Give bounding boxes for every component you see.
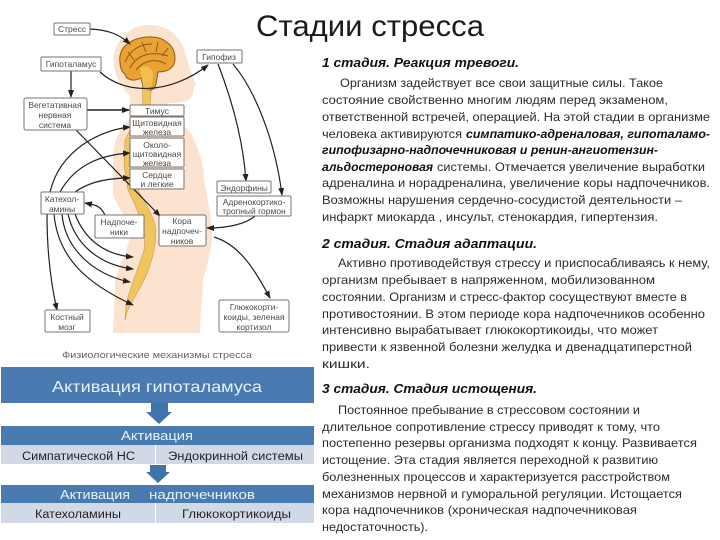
row: sympathetic and endocrine: Эндокринной системы — [168, 451, 303, 463]
box: ACTH: тропный гормон — [222, 206, 286, 216]
box: adrenal cortex: ников — [171, 236, 194, 246]
row: sympathetic and endocrine — [1, 445, 314, 464]
box: thymus — [130, 105, 184, 116]
brain folds — [125, 42, 168, 70]
box: adrenal cortex — [159, 215, 206, 246]
body: stage 2: привести к язвенной болезни желудка и двенадцатиперстной — [322, 340, 692, 354]
box: thyroid: Щитовидная — [132, 118, 182, 128]
body: stage 3: постепенно резервы организма подходят к концу. Развивается — [322, 436, 697, 450]
box: stress — [54, 23, 90, 35]
block: adrenal activation: надпочечников — [149, 488, 255, 502]
block: adrenal activation — [1, 485, 314, 503]
heading: stage 3: 3 стадия. Стадия истощения. — [322, 382, 537, 396]
box: autonomic nervous system: нервная — [39, 110, 72, 120]
block: adrenal activation: Активация — [60, 488, 130, 502]
title: Стадии стресса — [256, 10, 484, 43]
box: adrenal cortex: Кора — [172, 216, 192, 226]
arrows — [47, 29, 282, 310]
diagram caption: Физиологические механизмы стресса — [62, 350, 253, 361]
body: stage 1: ответственной встречей, операцией. На этой стадии в организме — [322, 110, 710, 124]
box: pituitary: Гипофиз — [202, 52, 236, 62]
body: stage 2: организм пребывает в напряженном, мобилизованном — [322, 273, 655, 287]
body: stage 3: истощение. Эта стадия является переходной к развитию — [322, 453, 658, 467]
body: stage 1: симпатико-адреналовая, гипоталамо- — [466, 127, 710, 141]
body: stage 2 — [322, 256, 710, 371]
box: thyroid: железа — [143, 127, 171, 137]
box: autonomic nervous system: система — [39, 120, 71, 130]
body: stage 1: Возможны нарушения сердечно-сосудистой деятельности – — [322, 193, 682, 207]
body: stage 3: недостаточность). — [322, 520, 428, 534]
box: parathyroid: железа — [143, 158, 171, 168]
body: stage 2: интенсивно вырабатывает глюкокортикоиды, что может — [322, 323, 659, 337]
box: bone marrow: Костный — [50, 312, 84, 322]
box: autonomic nervous system: Вегетативная — [28, 100, 82, 110]
box: ACTH — [217, 196, 291, 216]
brain stem — [140, 66, 153, 90]
body: stage 1: системы. Отмечается увеличение выработки — [437, 160, 705, 174]
box: catecholamines: Катехол- — [45, 194, 79, 204]
arrow down 1 — [146, 403, 172, 424]
body: stage 1 — [322, 76, 710, 224]
box: adrenal glands: ники — [110, 227, 128, 237]
box: heart and lungs: Сердце — [142, 170, 172, 180]
box: adrenal glands: Надпоче- — [101, 217, 138, 227]
anatomical diagram: physiological stress mechanisms — [24, 23, 291, 361]
box: hypothalamus — [41, 57, 101, 71]
box: heart and lungs — [130, 169, 184, 189]
body silhouette — [113, 25, 212, 333]
box: parathyroid: Около- — [143, 140, 171, 150]
block: hypothalamus activation — [1, 367, 314, 403]
body: stage 1: адреналина и норадреналина, увеличение коры надпочечников. — [322, 176, 710, 190]
body: stage 3: болезненных процессов и характеризуется расстройством — [322, 470, 670, 484]
box: thymus: Тимус — [145, 106, 170, 116]
body: stage 1: инфаркт миокарда , инсульт, стенокардия, гипертензия. — [322, 210, 658, 224]
box: parathyroid: щитовидная — [133, 149, 182, 159]
body: stage 2: кишки. — [322, 357, 370, 371]
box: glucocorticoids — [219, 300, 289, 332]
block: activation — [1, 426, 314, 445]
box: ACTH: Адренокортико- — [223, 197, 285, 207]
box: adrenal glands — [95, 215, 144, 238]
box: bone marrow — [45, 310, 90, 332]
body: stage 1: состояние свойственно многим людям перед экзаменом, — [322, 93, 668, 107]
body: stage 3: Постоянное пребывание в стрессовом состоянии и — [338, 403, 640, 417]
flowchart: stress activation — [1, 367, 314, 523]
box: catecholamines — [41, 192, 84, 214]
box: thyroid — [130, 117, 184, 137]
row: catecholamines and glucocorticoids — [1, 503, 314, 523]
row: catecholamines and glucocorticoids: Катехоламины — [35, 509, 121, 521]
box: hypothalamus: Гипоталамус — [46, 59, 97, 69]
box: glucocorticoids: Глюкокорти- — [230, 302, 278, 312]
box: stress: Стресс — [58, 24, 87, 34]
box: autonomic nervous system — [24, 98, 87, 130]
box: glucocorticoids: кортизол — [236, 322, 272, 332]
box: bone marrow: мозг — [58, 322, 76, 332]
heading: stage 2: 2 стадия. Стадия адаптации. — [321, 237, 537, 251]
body: stage 3: длительное сопротивление стрессу приводят к тому, что — [322, 420, 660, 434]
body: stage 2: состоянии. Организм и стресс-фактор сосуществуют вместе в — [322, 290, 687, 304]
spinal cord — [124, 80, 156, 320]
body: stage 2: Активно противодействуя стрессу и приспосабливаясь к нему, — [338, 256, 710, 270]
box: catecholamines: амины — [49, 204, 75, 214]
body: stage 1: Организм задействует все свои защитные силы. Такое — [340, 76, 663, 90]
block: hypothalamus activation: Активация гипоталамуса — [52, 379, 262, 396]
body: stage 3 — [322, 403, 697, 534]
box: glucocorticoids: коиды, зеленая — [223, 312, 285, 322]
text block: stage 1 — [322, 56, 710, 224]
box: parathyroid — [130, 138, 184, 168]
body: stage 3: механизмов нервной и гуморальной регуляции. Истощается — [322, 487, 682, 501]
box: pituitary — [197, 50, 242, 63]
box: endorphins: Эндорфины — [220, 183, 268, 193]
box: heart and lungs: и легкие — [140, 179, 174, 189]
body: stage 1: человека активируются — [322, 127, 462, 141]
arrow down 2 — [146, 465, 170, 483]
body: stage 3: кора надпочечников (хроническая надпочечниковая — [322, 503, 637, 517]
body: stage 2: противостоянии. В этом периоде кора надпочечников особенно — [322, 307, 705, 321]
text block: stage 3 — [322, 382, 697, 534]
row: sympathetic and endocrine: Симпатической НС — [22, 451, 135, 463]
heading: stage 1: 1 стадия. Реакция тревоги. — [322, 56, 519, 70]
block: activation: Активация — [121, 429, 193, 443]
text block: stage 2 — [321, 237, 710, 371]
body: stage 1: гипофизарно-надпочечниковая и ренин-ангиотензин- — [322, 143, 658, 157]
brain — [120, 37, 175, 90]
row: catecholamines and glucocorticoids: Глюкокортикоиды — [182, 509, 291, 521]
box: adrenal cortex: надпочеч- — [162, 226, 202, 236]
body: stage 1: альдостероновая — [322, 160, 433, 174]
